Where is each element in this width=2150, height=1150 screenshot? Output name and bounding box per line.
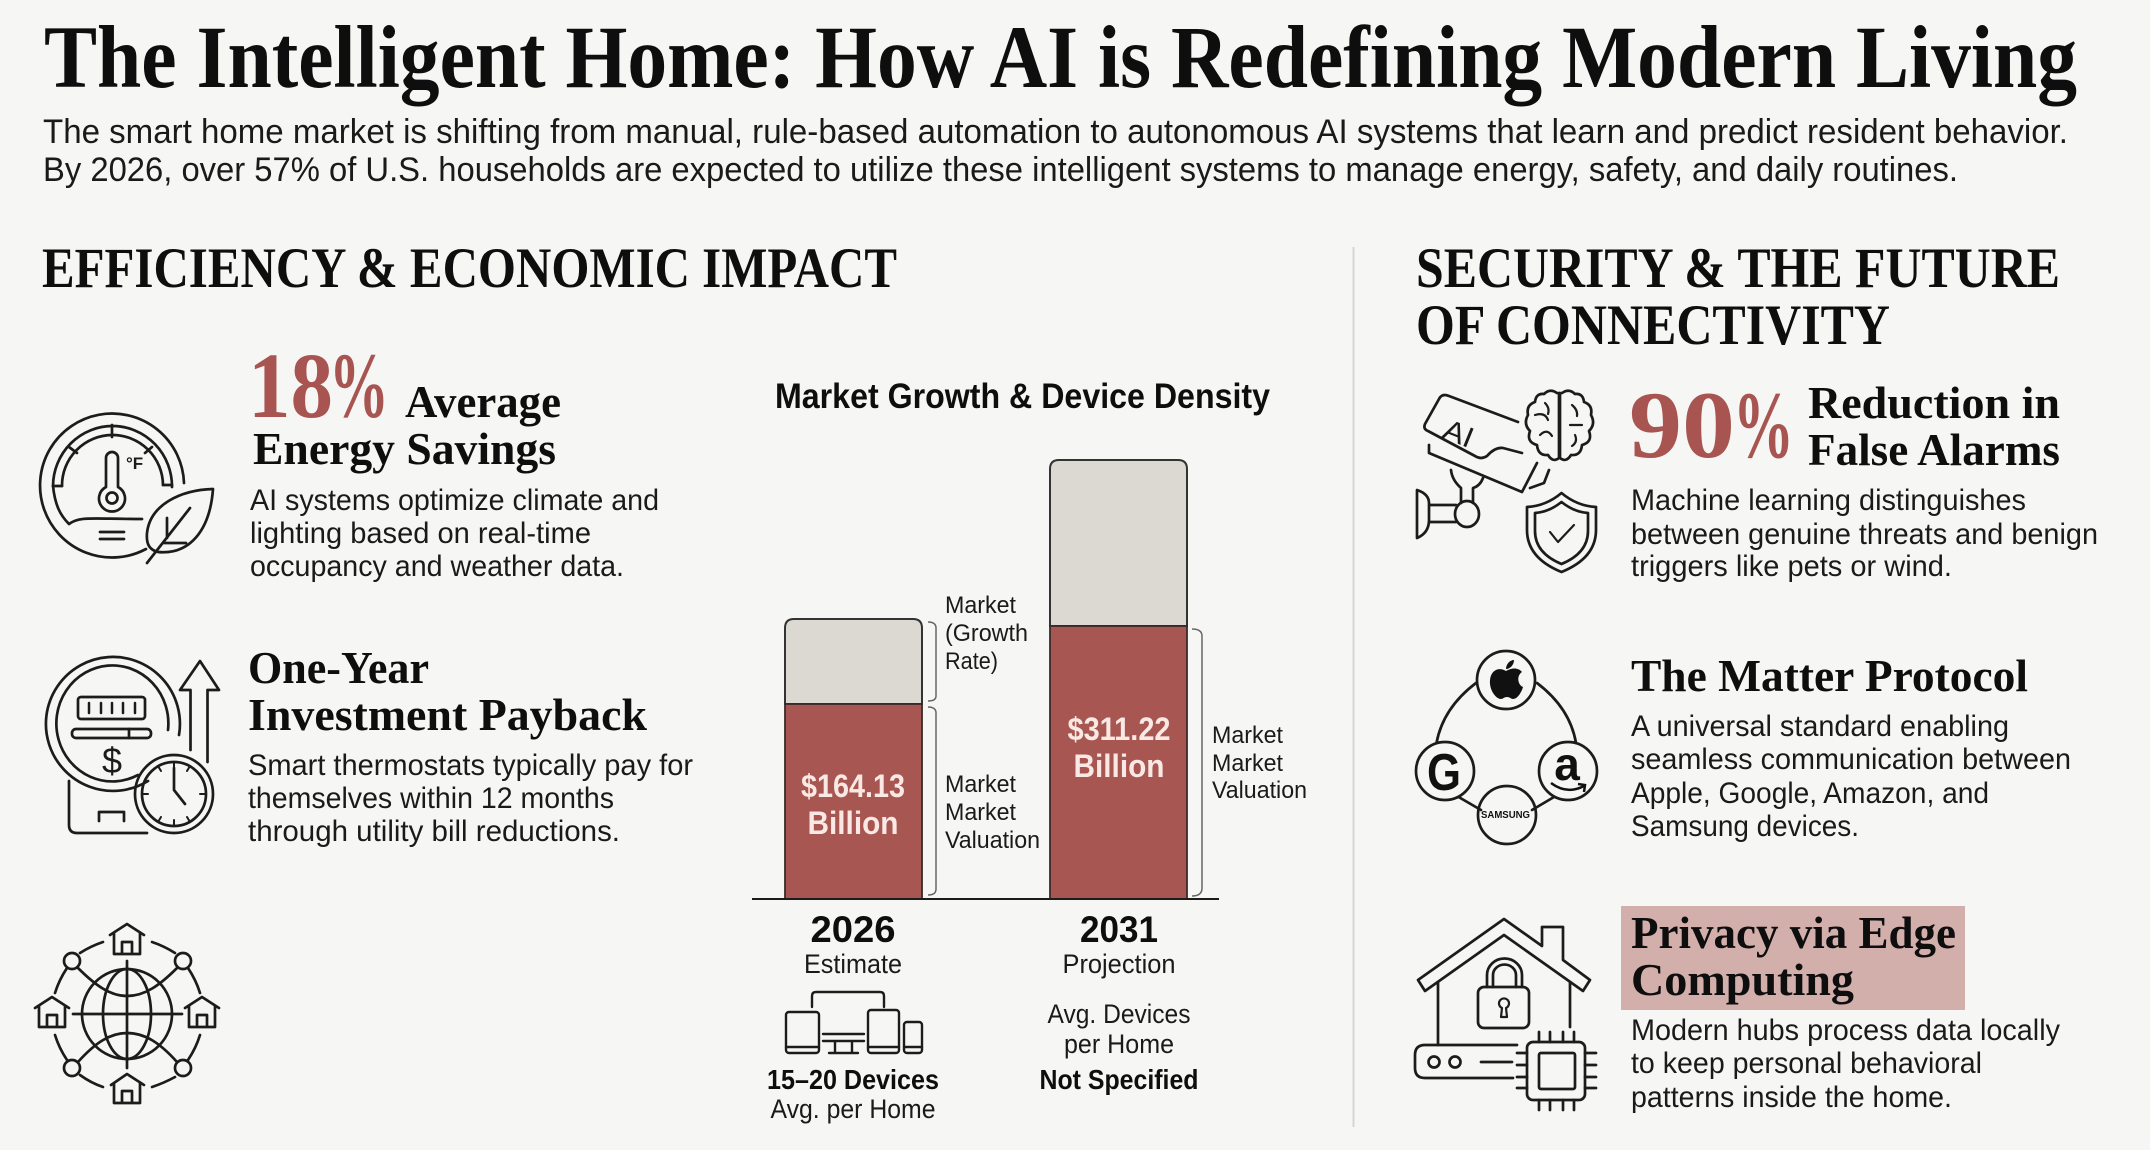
label: growth rate: (Growth [945, 620, 1028, 647]
heading: security and the future of connectivity [1416, 237, 2060, 357]
label: devices not specified: Avg. Devices [1048, 999, 1190, 1029]
heading: security and the future of connectivity: OF CONNECTIVITY [1416, 294, 1890, 357]
text: privacy description: patterns inside the home. [1631, 1081, 1952, 1114]
heading: security and the future of connectivity: SECURITY & THE FUTURE [1416, 237, 2060, 300]
text: energy savings description: lighting based on real-time [250, 517, 591, 550]
label: growth rate: Market [945, 592, 1016, 619]
subtitle: The smart home market is shifting from manual, rule-based automation to autonomous AI systems that learn and predict resident behavior. [43, 113, 2068, 151]
icon: connected brand circle: SAMSUNG [1481, 810, 1530, 821]
panel: privacy via edge computing [1415, 906, 2060, 1114]
icon: devices [786, 992, 922, 1053]
label: market valuation 2031: Market [1212, 750, 1283, 777]
bar: 2031 [1050, 460, 1187, 899]
heading: privacy via edge computing with highlight: Computing [1631, 954, 1854, 1005]
subtitle [43, 113, 2068, 189]
text: matter description: Apple, Google, Amazon, and [1631, 777, 1989, 810]
chart title: Market Growth & Device Density [775, 377, 1270, 416]
heading: average energy savings: Average [405, 376, 561, 427]
label: market valuation 2026 [945, 771, 1040, 854]
label: growth rate: Rate) [945, 648, 998, 675]
label: 15-20 devices [767, 1064, 939, 1124]
label: market valuation 2031: Valuation [1212, 777, 1307, 804]
bar: 2031: Billion [1074, 748, 1164, 784]
panel: matter protocol [1416, 650, 2071, 844]
bar: 2026: Billion [808, 805, 898, 841]
text: false alarms description: between genuine threats and benign [1631, 518, 2098, 551]
label: growth rate [945, 592, 1028, 675]
bar chart [752, 460, 1219, 899]
label: 15-20 devices: 15–20 Devices [767, 1064, 939, 1095]
label: 15-20 devices: Avg. per Home [770, 1094, 936, 1124]
label: market valuation 2026: Market [945, 799, 1016, 826]
text: payback description [248, 749, 693, 848]
text: matter description: A universal standard enabling [1631, 710, 2009, 743]
stat: 90 percent [1629, 372, 1794, 478]
stat: 18 percent: % [329, 335, 389, 438]
bar: 2026: $164.13 [801, 768, 905, 804]
label: market valuation 2031 [1212, 722, 1307, 804]
label: 2031 projection [1062, 909, 1176, 979]
panel: market growth chart [752, 377, 1307, 1124]
heading: one-year investment payback: One-Year [248, 642, 429, 693]
label: market valuation 2026: Market [945, 771, 1016, 798]
label: market valuation 2026: Valuation [945, 827, 1040, 854]
heading: average energy savings: Energy Savings [253, 423, 556, 474]
icon: connected brand circle: G [1427, 744, 1461, 802]
label: 2026 estimate: Estimate [804, 949, 902, 979]
icon: thermostat and leaf: °F [126, 454, 143, 473]
stat: 18 percent: 18 [248, 335, 333, 438]
label: devices not specified: Not Specified [1040, 1064, 1198, 1095]
icon: globe and connected homes [35, 924, 219, 1103]
stat: 90 percent: 90 [1629, 372, 1735, 478]
text: false alarms description: triggers like pets or wind. [1631, 550, 1952, 583]
panel: investment payback [46, 642, 693, 848]
text: energy savings description: AI systems optimize climate and [250, 484, 659, 517]
heading: privacy via edge computing with highlight [1621, 906, 1965, 1010]
text: energy savings description: occupancy and weather data. [250, 550, 624, 583]
label: 2031 projection: 2031 [1080, 909, 1158, 950]
icon: AI camera, brain and shield: AI [1438, 414, 1478, 455]
text: payback description: themselves within 12 months [248, 782, 614, 815]
bar: 2031: $311.22 [1068, 711, 1170, 747]
heading: the matter protocol: The Matter Protocol [1631, 650, 2028, 701]
text: energy savings description [250, 484, 659, 583]
text: privacy description [1631, 1014, 2060, 1114]
heading: reduction in false alarms: Reduction in [1808, 377, 2060, 428]
heading: efficiency and economic impact: EFFICIENCY & ECONOMIC IMPACT [42, 237, 897, 300]
bar: 2026 [785, 619, 922, 899]
text: matter description: seamless communication between [1631, 743, 2071, 776]
label: 2031 projection: Projection [1062, 949, 1176, 979]
icon: AI camera, brain and shield [1417, 391, 1596, 572]
heading: reduction in false alarms [1808, 377, 2060, 475]
text: payback description: through utility bill reductions. [248, 815, 620, 848]
icon: thermostat and leaf [40, 414, 213, 563]
heading: one-year investment payback: Investment Payback [248, 689, 647, 740]
heading: average energy savings [253, 376, 561, 474]
text: false alarms description: Machine learning distinguishes [1631, 484, 2026, 517]
text: matter description: Samsung devices. [1631, 810, 1859, 843]
stat: 90 percent: % [1733, 372, 1794, 478]
subtitle: By 2026, over 57% of U.S. households are expected to utilize these intelligent systems to manage energy, safety, and daily routines. [43, 151, 1958, 189]
heading: reduction in false alarms: False Alarms [1808, 424, 2060, 475]
text: payback description: Smart thermostats typically pay for [248, 749, 693, 782]
label: devices not specified: per Home [1064, 1029, 1174, 1059]
text: privacy description: Modern hubs process data locally [1631, 1014, 2060, 1047]
text: false alarms description [1631, 484, 2098, 583]
text: matter description [1631, 710, 2071, 843]
heading: privacy via edge computing with highlight: Privacy via Edge [1631, 907, 1956, 958]
panel: false alarms [1417, 372, 2098, 583]
icon: connected brand circle [1416, 651, 1597, 844]
label: market valuation 2031: Market [1212, 722, 1283, 749]
icon: meter, clock and arrow [46, 657, 219, 833]
icon: meter, clock and arrow: $ [102, 740, 122, 781]
text: privacy description: to keep personal behavioral [1631, 1047, 1982, 1080]
panel: energy savings [40, 335, 659, 583]
icon: house, lock, router and chip [1415, 919, 1596, 1110]
stat: 18 percent [248, 335, 389, 438]
label: devices not specified [1040, 999, 1198, 1095]
label: 2026 estimate: 2026 [810, 909, 896, 950]
icon: connected brand circle: a [1554, 738, 1580, 790]
heading: one-year investment payback [248, 642, 647, 740]
brackets [928, 622, 1202, 896]
label: 2026 estimate [804, 909, 902, 979]
